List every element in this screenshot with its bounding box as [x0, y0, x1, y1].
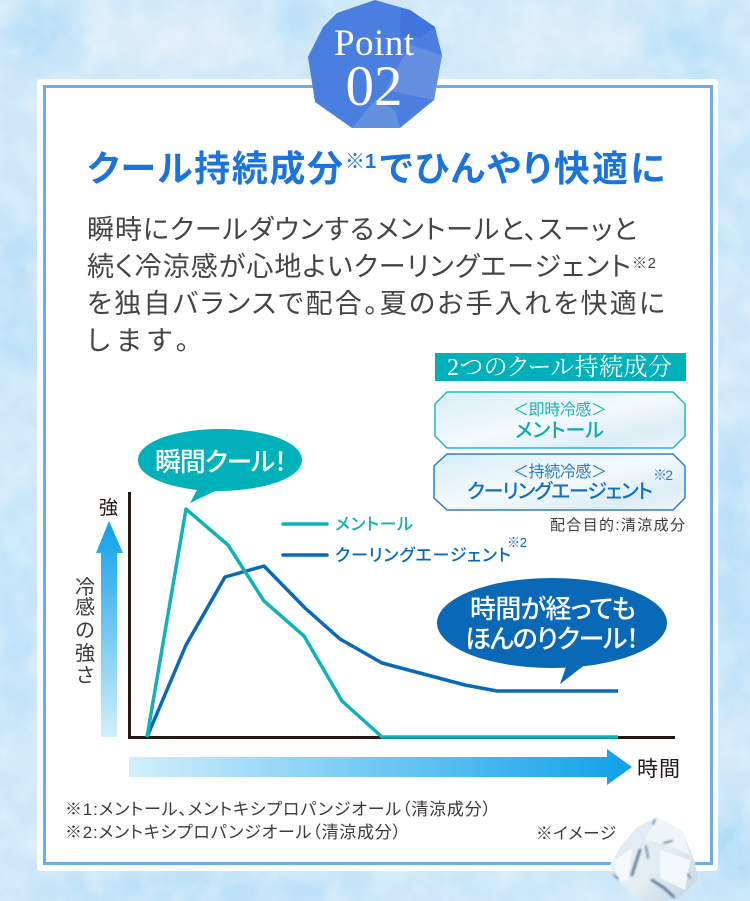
box: cooling agent: クーリングエージェント [467, 480, 653, 503]
title [87, 148, 665, 189]
box: menthol [435, 392, 685, 448]
axis label: strong: 強 [99, 497, 118, 519]
legend [283, 515, 527, 565]
badge: Point 02: Point [334, 23, 415, 64]
axis label: cooling intensity [75, 576, 95, 687]
text block: description: を独自バランスで配合。夏のお手入れを快適に [87, 289, 665, 319]
arrow: horizontal time [129, 749, 632, 785]
text block: description [87, 215, 665, 356]
title: ※1 [345, 151, 376, 173]
axes [130, 492, 675, 738]
callout: lasting cool [437, 578, 667, 684]
title: クール持続成分 [87, 148, 343, 189]
footnotes [65, 800, 491, 842]
heading: two cool ingredients: 2つのクール持続成分 [447, 354, 672, 381]
box: menthol: メントール [515, 420, 604, 442]
callout: instant cool [138, 429, 302, 503]
axis label: cooling intensity: の [75, 620, 95, 642]
caption: image note: ※イメージ [536, 825, 616, 843]
text block: description: します。 [87, 326, 189, 356]
callout: instant cool: 瞬間クール！ [155, 447, 287, 477]
chart: cooling over time [130, 492, 675, 738]
box: cooling agent: ※2 [653, 467, 673, 483]
box: cooling agent [434, 454, 685, 510]
footnotes: ※2:メントキシプロパンジオール（清涼成分） [65, 823, 401, 842]
axis label: cooling intensity: 強 [75, 642, 95, 665]
panel: white card with blue border [37, 79, 718, 871]
arrow: vertical intensity [96, 521, 123, 737]
callout: lasting cool: ほんのりクール！ [465, 624, 639, 654]
icon: ice cube [610, 817, 698, 901]
axis label: cooling intensity: さ [76, 665, 94, 687]
text block: description: ※2 [632, 255, 656, 272]
axis label: cooling intensity: 冷 [75, 576, 95, 599]
axis label: time: 時間 [637, 758, 680, 781]
line: menthol [147, 509, 618, 737]
legend: メントール [335, 515, 413, 534]
box: menthol: ＜即時冷感＞ [513, 401, 607, 419]
legend: クーリングエージェント [335, 546, 511, 565]
badge: Point 02: 02 [346, 55, 402, 118]
badge: Point 02 [308, 0, 442, 128]
callout: lasting cool: 時間が経っても [470, 594, 636, 624]
line: cooling agent [147, 566, 618, 737]
box: cooling agent: ＜持続冷感＞ [513, 463, 607, 481]
footnotes: ※1:メントール、メントキシプロパンジオール（清涼成分） [65, 800, 491, 819]
title: でひんやり快適に [380, 148, 665, 189]
legend: ※2 [507, 535, 527, 550]
text block: description: 瞬時にクールダウンするメントールと、スーッと [87, 215, 637, 245]
caption: purpose: 配合目的:清涼成分 [550, 517, 685, 534]
axis label: cooling intensity: 感 [75, 596, 95, 619]
text block: description: 続く冷涼感が心地よいクーリングエージェント [87, 252, 631, 282]
